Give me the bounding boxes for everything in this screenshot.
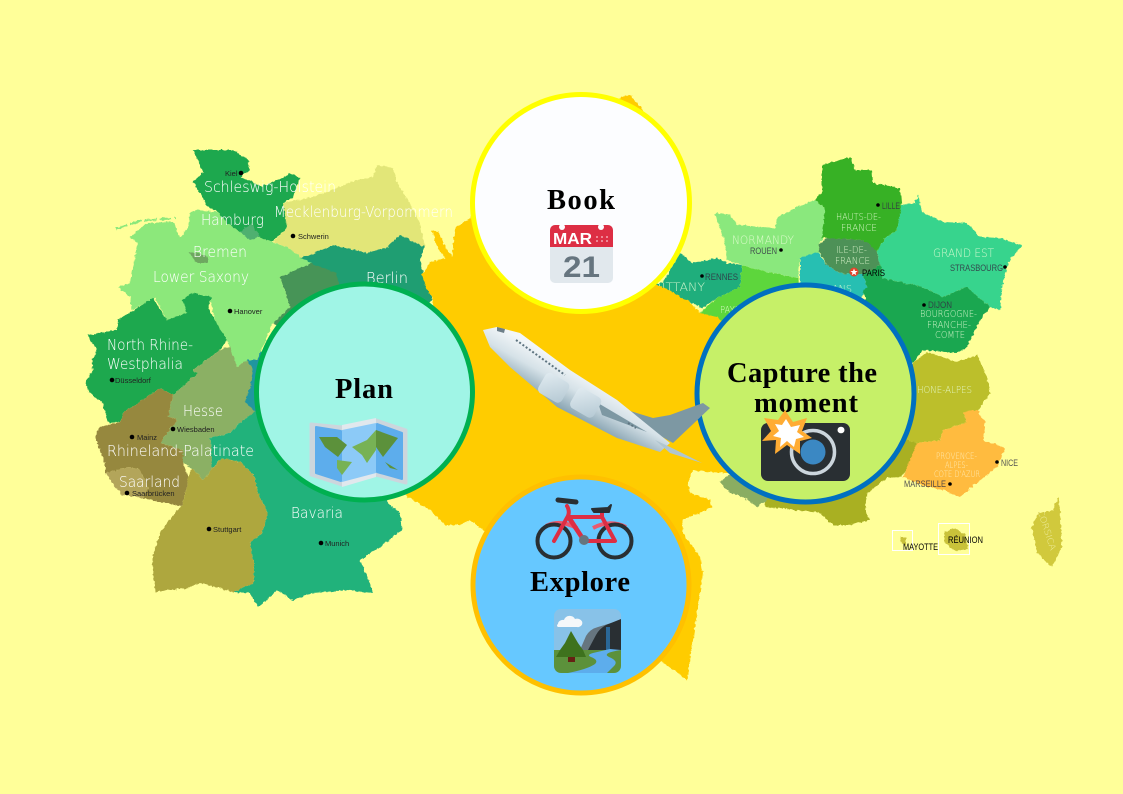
German city markers: Mainz xyxy=(137,433,157,442)
icon: world map xyxy=(311,418,406,487)
Brittany region xyxy=(650,253,742,308)
central yellow France silhouette xyxy=(400,94,760,680)
German city markers: Wiesbaden xyxy=(177,425,215,434)
engine right xyxy=(568,386,603,420)
French region labels: ANS xyxy=(832,284,852,295)
French city markers: PARIS xyxy=(862,268,885,278)
German state labels: Rhineland-Palatinate xyxy=(107,442,254,460)
icon: national park landscape xyxy=(554,609,621,673)
French city markers xyxy=(700,201,1018,552)
French region labels: PROVENCE- xyxy=(936,452,977,462)
Baden-Wurttemberg region xyxy=(152,458,268,592)
French region labels: COTE D'AZUR xyxy=(934,470,980,480)
French region labels: BOURGOGNE- xyxy=(920,309,977,320)
French region labels: NORMANDY xyxy=(732,233,794,247)
German city markers: Stuttgart xyxy=(213,525,242,534)
German state labels xyxy=(107,178,453,522)
French city markers: MARSEILLE xyxy=(904,479,946,489)
heading: Explore: Explore xyxy=(530,567,630,598)
fuselage xyxy=(483,327,670,452)
Thuringia region xyxy=(240,350,300,420)
wing xyxy=(598,403,647,432)
Frisian islands xyxy=(116,218,176,229)
Ile-de-France region xyxy=(818,238,880,275)
Schleswig-Holstein region xyxy=(193,150,300,242)
French region labels: HONE-ALPES xyxy=(917,385,972,396)
Bremen region xyxy=(188,252,208,263)
infographic canvas xyxy=(86,92,1063,696)
Grand Est region xyxy=(877,195,1022,310)
French region labels: FRANCE xyxy=(841,223,877,234)
icon: calendar: 21 xyxy=(563,251,600,284)
cockpit and windows xyxy=(497,327,636,428)
German state labels: Mecklenburg-Vorpommern xyxy=(274,203,453,221)
icon: calendar xyxy=(550,224,613,284)
German city markers: Hanover xyxy=(234,307,263,316)
Hauts-de-France region xyxy=(815,157,902,252)
Bourgogne-Franche-Comte region xyxy=(863,265,990,363)
Normandy region xyxy=(715,200,825,278)
French region labels: FRANCE xyxy=(835,256,870,267)
airplane illustration xyxy=(483,327,710,463)
heading: Capture the moment xyxy=(727,358,877,419)
German state labels: Bremen xyxy=(193,243,247,261)
German state labels: Bavaria xyxy=(291,504,343,522)
Provence region xyxy=(903,410,1005,497)
French region labels: PAYS xyxy=(720,305,740,316)
German city markers: Düsseldorf xyxy=(115,376,152,385)
German city markers: Schwerin xyxy=(298,232,329,241)
German state labels: Westphalia xyxy=(107,355,183,373)
French region labels: ILE-DE- xyxy=(836,245,867,256)
tail fin xyxy=(627,403,710,443)
icon: calendar: MAR xyxy=(553,231,592,248)
Centre region xyxy=(800,252,867,300)
German state labels: Schleswig-Holstein xyxy=(204,178,336,196)
map: Germany xyxy=(85,150,453,607)
French region labels: ALPES- xyxy=(945,461,968,471)
French city markers: NICE xyxy=(1001,458,1018,468)
French region labels: CORSICA xyxy=(1035,509,1057,552)
Pays de la Loire region xyxy=(700,265,800,340)
heading: Capture the moment: moment xyxy=(754,388,858,419)
French city markers: RÉUNION xyxy=(948,535,983,545)
Saxony-Anhalt region xyxy=(273,263,340,340)
Bavaria region xyxy=(210,380,402,607)
map: France regions xyxy=(645,157,1062,567)
German city markers: Munich xyxy=(325,539,349,548)
French region labels: GRAND EST xyxy=(933,246,994,260)
French region labels: BRITTANY xyxy=(645,280,705,294)
German city markers: Saarbrücken xyxy=(132,489,175,498)
French region labels: COMTE xyxy=(935,330,965,341)
heading: Plan: Plan xyxy=(335,374,393,405)
Auvergne-Rhone-Alpes region xyxy=(880,352,990,443)
German city markers xyxy=(110,169,349,548)
Hesse region xyxy=(160,347,255,480)
France inset boxes xyxy=(892,524,970,554)
German city markers: Kiel xyxy=(225,169,238,178)
continents xyxy=(319,430,398,475)
icon: camera with flash xyxy=(761,410,850,481)
French city markers: RENNES xyxy=(705,272,738,282)
Occitanie region xyxy=(760,430,920,525)
North Rhine-Westphalia region xyxy=(85,293,227,423)
Mayotte island xyxy=(900,537,906,546)
icon: bicycle xyxy=(538,500,632,558)
Nouvelle-Aquitaine region xyxy=(720,470,780,507)
Rhineland-Palatinate region xyxy=(95,388,188,506)
French region labels: HAUTS-DE- xyxy=(836,212,881,223)
Brandenburg region xyxy=(300,235,432,330)
German state labels: Hesse xyxy=(183,402,223,420)
German state labels: Lower Saxony xyxy=(153,268,249,286)
panel: Book xyxy=(472,94,690,312)
Lower Saxony region xyxy=(118,210,312,367)
French city markers: LILLE xyxy=(882,201,900,211)
Corsica region xyxy=(1032,497,1062,567)
Reunion island xyxy=(944,528,968,551)
Saarland region xyxy=(105,467,148,498)
panel: Plan xyxy=(256,284,472,500)
Mecklenburg region xyxy=(273,165,425,257)
French region labels: FRANCHE- xyxy=(927,320,971,331)
German state labels: Hamburg xyxy=(201,211,264,229)
panel: Capture the moment xyxy=(697,285,914,502)
German state labels: Berlin xyxy=(366,269,408,287)
Hamburg region xyxy=(240,223,260,240)
French city markers: STRASBOURG xyxy=(950,263,1003,273)
horizontal stabiliser xyxy=(655,440,702,463)
French city markers: DIJON xyxy=(928,300,952,310)
German state labels: Saarland xyxy=(119,473,180,491)
French city markers: MAYOTTE xyxy=(903,542,938,552)
engine left xyxy=(536,371,571,405)
French region labels xyxy=(645,212,1057,552)
French city markers: ROUEN xyxy=(750,246,777,256)
panel: Explore xyxy=(473,477,689,693)
heading: Capture the moment: Capture the xyxy=(727,358,877,389)
heading: Book: Book xyxy=(547,185,615,216)
German state labels: North Rhine- xyxy=(107,336,193,354)
